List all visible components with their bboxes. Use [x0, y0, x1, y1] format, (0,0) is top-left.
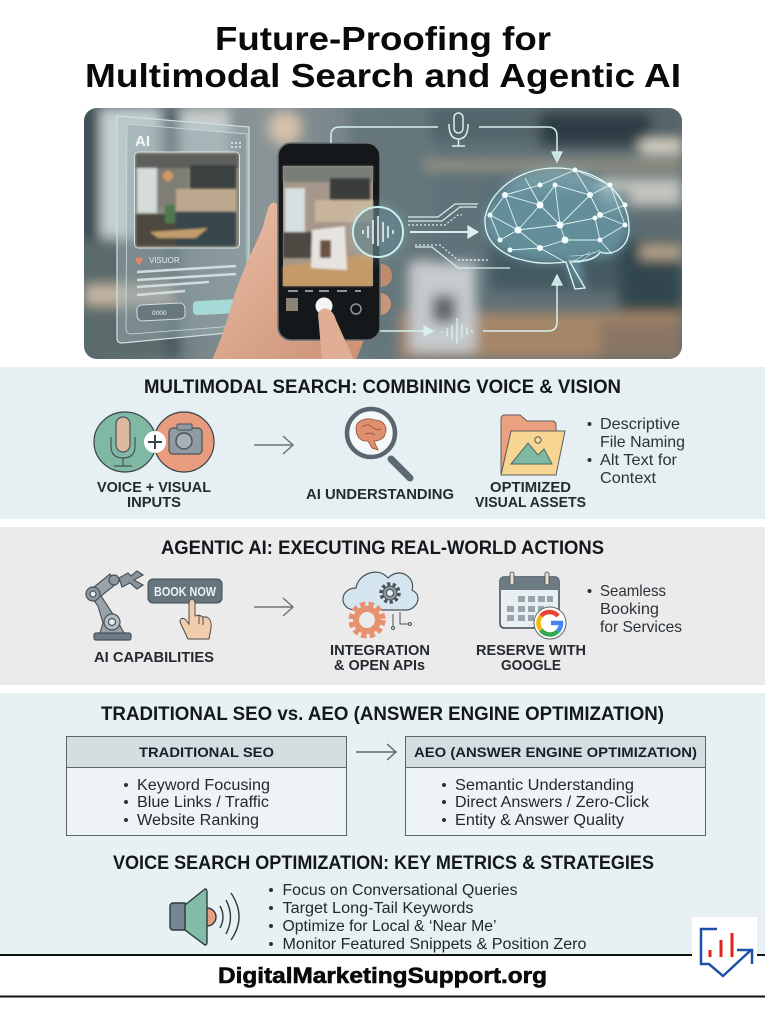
table: aeo: Semantic Understanding [455, 777, 634, 794]
finger [318, 308, 354, 360]
glass panel: 0000 [152, 310, 167, 317]
icon: cloud with gears [343, 572, 418, 635]
icon: book now button with hand [148, 579, 222, 639]
table: traditional seo [66, 736, 346, 836]
panel: agentic ai [0, 527, 765, 685]
bullets: visual assets: Context [600, 470, 657, 487]
label: ai understanding: AI UNDERSTANDING [306, 486, 454, 503]
arrow [254, 598, 293, 616]
label: optimized visual assets [475, 479, 586, 511]
icon: folder with picture [501, 415, 565, 475]
microphone [449, 113, 468, 146]
bullets: voice strategies: Focus on Conversational Queries [282, 882, 518, 899]
bullets: voice strategies [269, 882, 586, 953]
bullets: visual assets: Alt Text for [600, 452, 678, 469]
bullets: booking [588, 583, 682, 636]
heading: multimodal search: MULTIMODAL SEARCH: COMBINING VOICE & VISION [144, 377, 621, 398]
heading: seo vs aeo: TRADITIONAL SEO vs. AEO (ANSWER ENGINE OPTIMIZATION) [101, 704, 664, 725]
bullets: voice strategies: Monitor Featured Snippets & Position Zero [282, 936, 586, 953]
panel: multimodal search [0, 367, 765, 519]
glass panel: VISUOR [149, 256, 180, 265]
label: voice + visual inputs: VOICE + VISUAL [97, 479, 211, 496]
label: optimized visual assets: VISUAL ASSETS [475, 494, 586, 511]
title [85, 20, 681, 94]
icon: speaker [170, 889, 239, 945]
heading: voice search: VOICE SEARCH OPTIMIZATION: KEY METRICS & STRATEGIES [113, 853, 654, 874]
icon: robot arm [86, 571, 143, 640]
bullets: voice strategies: Target Long-Tail Keywords [282, 900, 474, 917]
hand [212, 203, 392, 360]
bullets: booking: Seamless [600, 583, 666, 600]
logo [692, 917, 757, 977]
data arrows [331, 127, 562, 344]
bullets: booking: for Services [600, 619, 682, 636]
phone [278, 143, 380, 340]
arrow [254, 436, 293, 454]
icon: magnifier with brain [347, 409, 410, 478]
voice wave circle [350, 204, 406, 260]
website name: DigitalMarketingSupport.org [218, 963, 547, 988]
title: Future-Proofing for [215, 20, 551, 57]
table: traditional seo: Blue Links / Traffic [137, 794, 269, 811]
hero image: phone scanning a cafe, feeding an AI brain [84, 108, 682, 360]
glass panel [117, 116, 249, 343]
icon: book now button with hand: BOOK NOW [154, 585, 216, 599]
title: Multimodal Search and Agentic AI [85, 57, 681, 94]
label: integration and open apis: INTEGRATION [330, 642, 430, 659]
table: traditional seo: Website Ranking [137, 812, 259, 829]
table: traditional seo: TRADITIONAL SEO [139, 744, 274, 760]
heading: agentic ai: AGENTIC AI: EXECUTING REAL-WORLD ACTIONS [161, 538, 604, 559]
label: voice + visual inputs [97, 479, 211, 511]
table: aeo: Direct Answers / Zero-Click [455, 794, 649, 811]
table: traditional seo: Keyword Focusing [137, 777, 270, 794]
table: aeo: Entity & Answer Quality [455, 812, 624, 829]
label: reserve with google: RESERVE WITH [476, 642, 586, 659]
bullets: visual assets [588, 416, 685, 487]
table: aeo: AEO (ANSWER ENGINE OPTIMIZATION) [414, 744, 697, 760]
label: optimized visual assets: OPTIMIZED [490, 479, 571, 496]
label: voice + visual inputs: INPUTS [127, 494, 181, 511]
label: ai capabilities: AI CAPABILITIES [94, 649, 214, 666]
icon: voice plus camera [94, 412, 214, 472]
label: integration and open apis [330, 642, 430, 674]
neural brain [485, 168, 629, 290]
label: integration and open apis: & OPEN APIs [334, 657, 425, 674]
bullets: visual assets: File Naming [600, 434, 685, 451]
icon: calendar with google badge [500, 572, 566, 639]
bullets: voice strategies: Optimize for Local & ‘Near Me’ [282, 918, 496, 935]
label: reserve with google: GOOGLE [501, 657, 561, 674]
glass panel: AI [135, 133, 150, 150]
bullets: visual assets: Descriptive [600, 416, 680, 433]
arrow [356, 744, 396, 760]
label: reserve with google [476, 642, 586, 674]
table: aeo [406, 736, 706, 836]
panel: seo comparison and voice search [0, 693, 765, 955]
bullets: booking: Booking [600, 601, 659, 618]
